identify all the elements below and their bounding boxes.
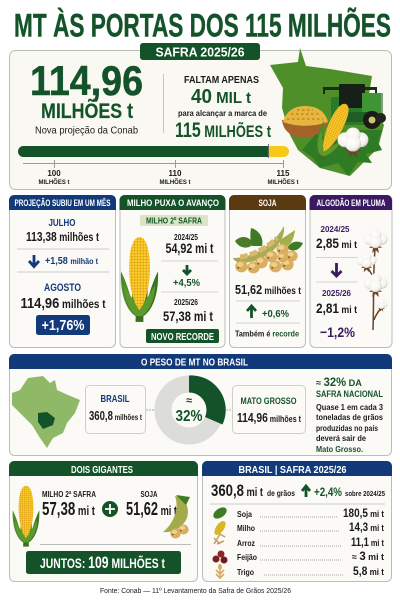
- total line: +2,4%: [314, 487, 342, 499]
- panel: dois gigantes: SOJA: [140, 490, 158, 499]
- cotton: [338, 128, 368, 158]
- card: Mato Grosso: MATO GROSSO: [240, 396, 296, 407]
- card: Brasil: [86, 386, 146, 434]
- panel: projeção subiu: AGOSTO: [44, 282, 81, 294]
- panel: soja: [229, 195, 306, 348]
- panel: milho: 2024/25: [174, 232, 198, 242]
- heading: O PESO DE MT NO BRASIL: [141, 356, 248, 368]
- scale axis: [23, 160, 299, 186]
- main unit: MILHÕES t: [41, 99, 133, 123]
- card: Brasil: 360,8 milhões t: [89, 408, 142, 423]
- soy illustration: [233, 226, 303, 273]
- row: trigo: [216, 564, 384, 579]
- panel: hero projection: [10, 43, 392, 190]
- callout text: produzidas no país: [316, 424, 378, 433]
- total banner: JUNTOS: 109 MILHÕES t: [40, 554, 165, 572]
- remaining text block: 40 MIL t: [191, 86, 252, 108]
- row: soja: Soja: [237, 509, 252, 519]
- row: milho: Milho: [237, 523, 255, 533]
- panel: algodão: 2,81 mi t: [316, 301, 358, 316]
- heading: SOJA: [258, 198, 277, 208]
- cotton illustration: [356, 229, 388, 330]
- leaves: [302, 130, 382, 176]
- panel: algodão: 2024/25: [320, 224, 350, 234]
- arrow down: [332, 263, 342, 276]
- remaining text block: para alcançar a marca de: [178, 108, 267, 118]
- scale axis: 115: [277, 169, 290, 178]
- card: Mato Grosso: 114,96 milhões t: [237, 410, 301, 425]
- heading: MILHO PUXA O AVANÇO: [127, 198, 219, 209]
- row: trigo: 5,8 mi t: [353, 566, 384, 578]
- heading: [9, 461, 198, 476]
- heading: [202, 461, 392, 476]
- corn: [308, 98, 358, 165]
- donut chart: ≈: [186, 395, 192, 407]
- callout text: Quase 1 em cada 3: [316, 403, 384, 412]
- row: milho: 14,3 mi t: [349, 522, 384, 534]
- panel: soja: +0,6%: [262, 309, 289, 320]
- card: Brasil: BRASIL: [100, 394, 130, 405]
- callout text: Mato Grosso.: [316, 445, 363, 454]
- panel: o peso de MT no Brasil: [9, 354, 392, 456]
- row: feijão: [212, 550, 384, 564]
- panel: dois gigantes: [9, 461, 198, 582]
- scale axis: MILHÕES t: [38, 177, 70, 186]
- panel: algodão: [310, 195, 392, 348]
- panel: projeção subiu: JULHO: [48, 217, 76, 229]
- soy illustration: [163, 495, 190, 538]
- panel: projeção subiu: 113,38 milhões t: [26, 229, 99, 244]
- donut chart: 32%: [176, 408, 203, 425]
- remaining text block: 115 MILHÕES t: [175, 119, 271, 142]
- panel: algodão: 2025/26: [322, 288, 351, 298]
- row: arroz: [214, 534, 384, 549]
- main caption: Nova projeção da Conab: [35, 126, 138, 136]
- panel: milho: 54,92 mi t: [166, 240, 214, 256]
- source line: Fonte: Conab — 11º Levantamento da Safra de Grãos 2025/26: [100, 588, 291, 595]
- panel: dois gigantes: 57,38 mi t: [42, 499, 95, 519]
- illustration: Mato Grosso map with crops: [270, 48, 386, 176]
- scale axis: 100: [47, 169, 61, 178]
- callout text: [316, 377, 384, 454]
- total line: 360,8 mi t: [211, 481, 263, 500]
- row: soja: [211, 505, 384, 521]
- remaining text block: [175, 74, 271, 142]
- callout text: toneladas de grãos: [316, 413, 383, 422]
- heading: BRASIL | SAFRA 2025/26: [238, 464, 347, 476]
- arrow down: [29, 255, 39, 266]
- scale axis: 110: [169, 169, 182, 178]
- heading: [9, 354, 392, 369]
- safra badge: [140, 43, 260, 60]
- donut chart: [163, 375, 226, 436]
- panel: milho: [120, 195, 226, 348]
- scale axis: MILHÕES t: [268, 177, 299, 186]
- panel: algodão: −1,2%: [320, 324, 355, 340]
- total banner: [26, 551, 181, 574]
- corn illustration: [121, 237, 158, 322]
- row: trigo: Trigo: [237, 567, 254, 577]
- safra badge: SAFRA 2025/26: [156, 46, 245, 60]
- panel: projeção subiu: [9, 195, 116, 348]
- heading: DOIS GIGANTES: [71, 464, 133, 476]
- heading: PROJEÇÃO SUBIU EM UM MÊS: [14, 197, 110, 209]
- panel: projeção subiu: +1,58 milhão t: [45, 256, 98, 267]
- map of Mato Grosso: [270, 48, 384, 176]
- panel: Brasil safra: [202, 461, 392, 582]
- corn illustration: [13, 486, 39, 547]
- heading: [310, 195, 392, 210]
- panel: soja: Também é recorde: [235, 328, 299, 338]
- row: feijão: ≈ 3 mi t: [352, 551, 384, 563]
- heading: [120, 195, 226, 210]
- panel: algodão: 2,85 mi t: [316, 236, 358, 251]
- percent badge: +1,76%: [42, 318, 85, 334]
- record badge: NOVO RECORDE: [151, 332, 214, 343]
- harvester: [323, 84, 386, 129]
- panel: soja: 51,62 milhões t: [235, 282, 302, 297]
- total line: [211, 481, 385, 500]
- card: Mato Grosso: [232, 386, 306, 434]
- plus icon: [102, 501, 118, 517]
- heading: [9, 195, 116, 210]
- arrow up: [247, 306, 256, 318]
- remaining text block: FALTAM APENAS: [184, 74, 259, 86]
- panel: dois gigantes: 51,62 mi t: [126, 499, 177, 519]
- panel: projeção subiu: 114,96 milhões t: [20, 295, 106, 312]
- panel: dois gigantes: MILHO 2ª SAFRA: [42, 490, 96, 499]
- arrow: [183, 265, 191, 274]
- row: milho: [212, 519, 384, 537]
- record badge: [146, 329, 219, 343]
- total line: sobre 2024/25: [345, 489, 385, 498]
- row: soja: 180,5 mi t: [343, 508, 384, 520]
- panel: milho: 2025/26: [174, 297, 198, 307]
- callout text: ≈ 32% DA: [316, 377, 362, 389]
- panel: milho: +4,5%: [173, 277, 201, 289]
- progress bar: [18, 144, 289, 158]
- row: arroz: 11,1 mi t: [351, 537, 384, 549]
- row: arroz: Arroz: [237, 538, 255, 548]
- total line: de grãos: [267, 489, 295, 498]
- main number: 114,96: [30, 57, 143, 104]
- scale axis: MILHÕES t: [160, 177, 191, 186]
- panel: milho: 57,38 mi t: [163, 308, 213, 324]
- soy bowl: [282, 106, 328, 138]
- row: feijão: Feijão: [237, 552, 257, 562]
- heading: [229, 195, 306, 210]
- map of Brazil: [12, 376, 80, 448]
- sub badge: MILHO 2º SAFRA: [146, 216, 202, 226]
- callout text: SAFRA NACIONAL: [316, 389, 383, 399]
- callout text: deverá sair de: [316, 434, 367, 443]
